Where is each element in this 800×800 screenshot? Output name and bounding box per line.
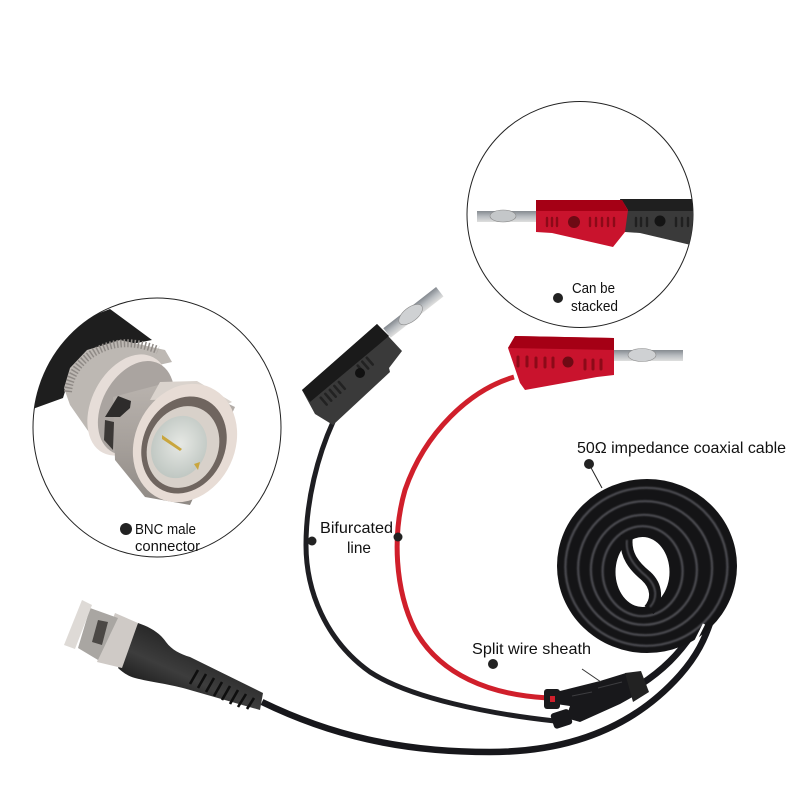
knurled collar: [97, 613, 138, 668]
label: split wire sheath: [472, 641, 601, 682]
coil of 50 ohm coaxial cable: [557, 479, 737, 656]
black branch wire: [306, 422, 555, 721]
cables: [262, 377, 714, 752]
strain relief boot: [118, 623, 263, 710]
callout circle: can be stacked: [467, 102, 695, 328]
label: BNC male connector: connector: [135, 538, 200, 555]
label: bifurcated line: [308, 520, 402, 557]
label: 50 ohm impedance coaxial cable: 50Ω impedance coaxial cable: [577, 440, 786, 457]
icon: stacked banana plugs: [477, 199, 695, 247]
red stacking banana plug: [508, 336, 683, 390]
icon: enlarged BNC connector: [34, 309, 238, 505]
label: can be stacked: stacked: [571, 298, 618, 315]
infographic canvas: [32, 101, 786, 756]
label: can be stacked: Can be: [572, 280, 615, 297]
main coaxial cable: [262, 610, 714, 752]
metal pin: [383, 286, 444, 339]
label: 50 ohm impedance coaxial cable: [577, 440, 786, 488]
black stacking banana plug: [302, 286, 444, 425]
upper coax strand: [640, 625, 698, 685]
split wire sheath connector: [544, 671, 649, 729]
label: bifurcated line: Bifurcated: [320, 520, 393, 537]
callout circle: BNC male connector: [30, 298, 281, 557]
label: split wire sheath: Split wire sheath: [472, 641, 591, 658]
small BNC connector with strain relief: [64, 600, 263, 710]
label: can be stacked: [553, 280, 618, 315]
label: BNC male connector: [120, 521, 200, 555]
label: bifurcated line: line: [347, 540, 371, 557]
red branch wire: [397, 377, 548, 698]
label: BNC male connector: BNC male: [135, 521, 196, 538]
